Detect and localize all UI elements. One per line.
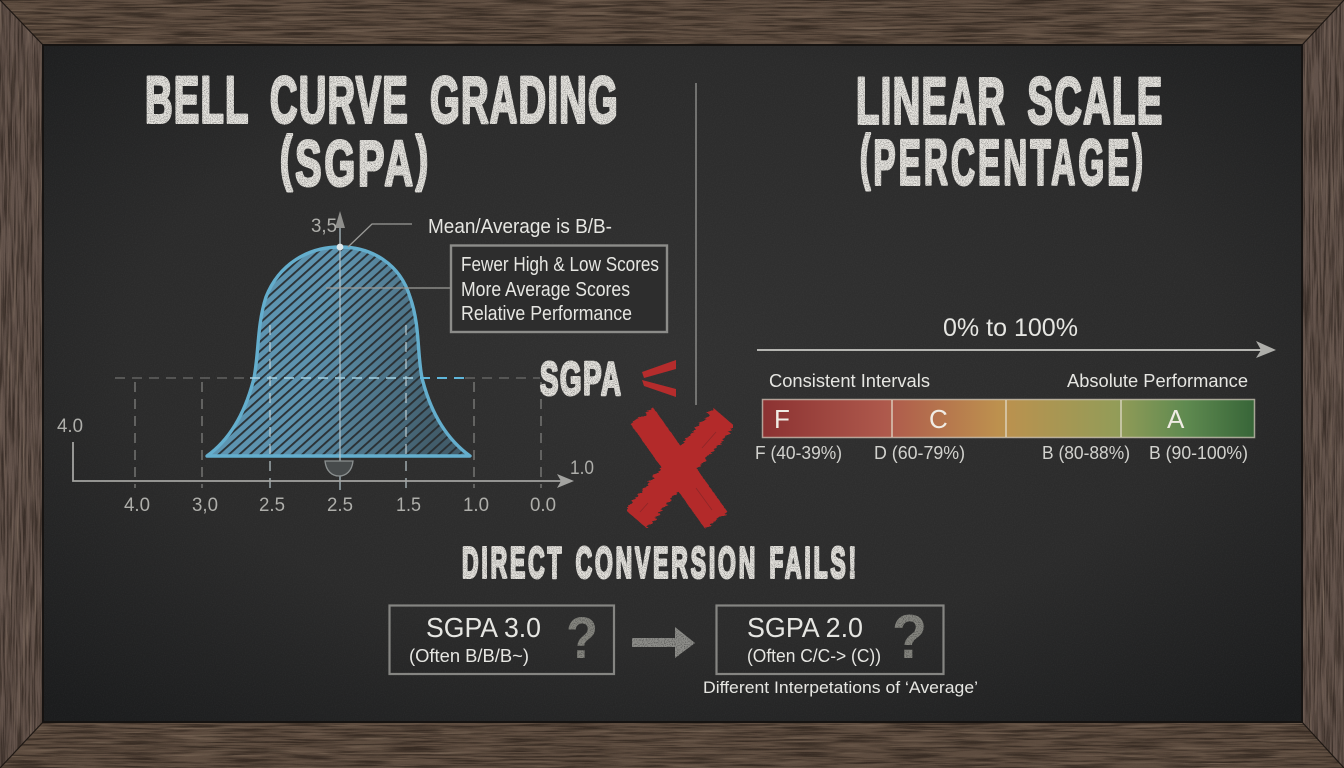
red less-than sign [642, 360, 676, 397]
callout box: relative performance notes: Relative Performance [461, 303, 632, 325]
grade range labels: D (60-79%) [874, 443, 965, 463]
heading: bell curve grading: SGPA [295, 129, 413, 200]
box: SGPA 2.0: (Often C/C-> (C)) [747, 646, 881, 666]
box: SGPA 2.0 [716, 603, 944, 674]
box: SGPA 2.0: SGPA 2.0 [747, 612, 863, 643]
grade range labels: F (40-39%) [755, 443, 842, 463]
arrow between boxes [632, 627, 695, 658]
heading: bell curve grading [145, 64, 618, 200]
box: SGPA 3.0 [390, 606, 614, 674]
bell curve chart [57, 211, 594, 516]
callout box: relative performance notes: More Average Scores [461, 279, 630, 301]
scale notes: Consistent Intervals [769, 371, 930, 391]
caption: different interpretations: Different Interpetations of ‘Average’ [703, 679, 978, 697]
grade range labels [755, 443, 1248, 463]
SGPA label: SGPA [540, 354, 621, 405]
icon: question mark: ? [892, 603, 927, 672]
red X mark [636, 416, 724, 520]
axis labels: 3,5 [311, 216, 337, 237]
scale notes [769, 371, 1248, 391]
grade bar: C [929, 404, 948, 434]
callout box: relative performance notes [326, 246, 667, 332]
centre divider [695, 83, 697, 405]
panel: direct conversion fails [390, 539, 978, 697]
axis labels: 1.0 [570, 458, 594, 479]
grade bar: A [1167, 404, 1185, 434]
grade bar: F [774, 404, 790, 434]
range label: 0% to 100% [943, 314, 1078, 342]
heading: linear scale: LINEAR SCALE [856, 65, 1162, 138]
heading: direct conversion fails: DIRECT CONVERSION FAILS! [462, 539, 856, 588]
gridlines and axes [73, 211, 574, 490]
grade range labels: B (80-88%) [1042, 443, 1130, 463]
axis labels: 3,0 [192, 495, 218, 516]
heading: linear scale: ) [1132, 125, 1143, 191]
callout: mean is B/B- [348, 215, 612, 247]
heading: bell curve grading: ( [280, 124, 293, 192]
axis labels: 2.5 [327, 495, 353, 516]
axis labels: 4.0 [57, 416, 83, 437]
bell shape [200, 240, 480, 460]
heading: bell curve grading: ) [416, 124, 428, 192]
box: SGPA 3.0: SGPA 3.0 [426, 612, 541, 643]
axis labels: 0.0 [530, 495, 556, 516]
heading: bell curve grading: BELL CURVE GRADING [145, 64, 618, 137]
small base marker [325, 461, 353, 476]
axis labels: 4.0 [124, 495, 150, 516]
axis labels: 1.5 [396, 495, 421, 516]
grade bar [762, 400, 1254, 438]
box: SGPA 3.0: (Often B/B/B~) [409, 646, 529, 666]
range arrow [757, 341, 1276, 358]
heading: linear scale: PERCENTAGE [873, 127, 1129, 198]
heading: linear scale [856, 65, 1162, 198]
callout box: relative performance notes: Fewer High & Low Scores [461, 254, 659, 276]
axis labels [57, 216, 594, 516]
grade range labels: B (90-100%) [1149, 443, 1248, 463]
scale notes: Absolute Performance [1067, 371, 1248, 391]
panel: bell curve grading [57, 64, 667, 516]
axis labels: 1.0 [463, 495, 489, 516]
panel: linear scale [755, 65, 1276, 463]
callout: mean is B/B-: Mean/Average is B/B- [428, 215, 612, 238]
heading: linear scale: ( [860, 125, 870, 191]
axis labels: 2.5 [259, 495, 285, 516]
icon: question mark: ? [566, 606, 598, 671]
